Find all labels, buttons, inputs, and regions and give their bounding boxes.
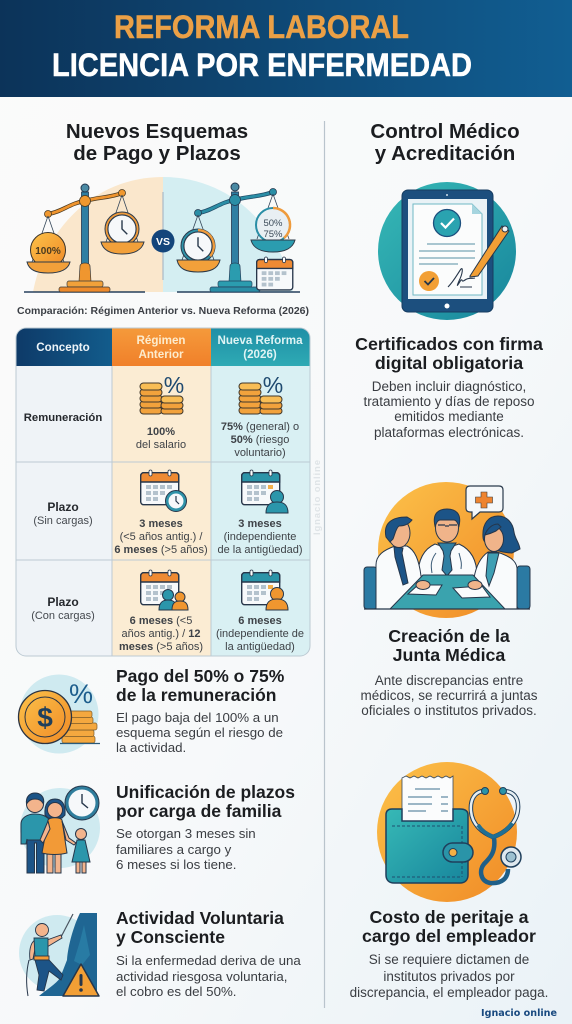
comparison table: [16, 328, 310, 656]
row: remuneración, anterior: 100%: [147, 426, 175, 438]
row: remuneración, reforma: 75% (general) o: [221, 421, 299, 433]
row: remuneración, anterior: [136, 372, 186, 451]
row: plazo sin cargas, reforma: 3 meses: [238, 518, 282, 530]
text: junta médica: [360, 626, 538, 718]
item: actividad voluntaria: Actividad Voluntaria: [116, 908, 284, 928]
row: remuneración, anterior: del salario: [136, 439, 186, 451]
text: costo de peritaje: [350, 907, 548, 1000]
header banner: [0, 0, 572, 97]
row labels: Remuneración: [24, 412, 102, 424]
comparison caption: Comparación: Régimen Anterior vs. Nueva Reforma (2026): [17, 305, 309, 317]
table header: Anterior: [138, 348, 184, 361]
left doctor: [376, 517, 425, 609]
icon: coin and percent: %: [69, 679, 93, 709]
left scale: 100%: [35, 246, 61, 257]
row: remuneración, reforma: 50% (riesgo: [231, 434, 289, 446]
icon: coin and percent: $: [37, 702, 53, 733]
item: pago 50 o 75: Pago del 50% o 75%: [116, 666, 285, 686]
item: unificación de plazos: por carga de familia: [116, 801, 282, 821]
row: plazo sin cargas, anterior: [114, 470, 208, 556]
right scale: [177, 183, 295, 292]
right doctor: [471, 516, 520, 609]
text: certificados: [355, 334, 543, 440]
item: actividad voluntaria: [19, 908, 301, 999]
item: pago 50 o 75: El pago baja del 100% a un: [116, 710, 279, 725]
text: certificados: digital obligatoria: [375, 353, 523, 373]
table header: Nueva Reforma: [217, 334, 303, 347]
table header: [36, 334, 303, 361]
icon: medical board: [364, 482, 530, 618]
heading: control médico: y Acreditación: [375, 142, 515, 165]
center doctor: [418, 509, 477, 576]
text: junta médica: Creación de la: [388, 626, 510, 646]
row: plazo con cargas, anterior: 6 meses (<5: [130, 615, 192, 627]
item: actividad voluntaria: el cobro es del 50%.: [116, 984, 236, 999]
row labels: Plazo: [47, 595, 79, 609]
icon: tablet with digital signature: [378, 182, 516, 320]
row: plazo con cargas, anterior: meses (>5 años): [119, 641, 203, 653]
VS badge: [152, 230, 174, 252]
text: junta médica: Junta Médica: [393, 645, 505, 665]
credit: Ignacio online: [481, 1008, 557, 1019]
item: pago 50 o 75: la actividad.: [116, 740, 186, 755]
icon: coin and percent: [18, 674, 100, 754]
right scale: 50%: [263, 218, 283, 229]
left scale: [27, 184, 144, 292]
row: plazo sin cargas, reforma: [217, 470, 303, 556]
speech bubble with cross: [466, 486, 503, 519]
text: certificados: emitidos mediante: [394, 409, 504, 424]
text: junta médica: oficiales o institutos privados.: [361, 703, 537, 718]
text: costo de peritaje: cargo del empleador: [362, 926, 536, 946]
table header: Concepto: [36, 341, 90, 354]
heading: Nuevos esquemas: [66, 120, 248, 165]
text: certificados: Deben incluir diagnóstico,: [372, 379, 526, 394]
heading: Nuevos esquemas: Nuevos Esquemas: [66, 120, 248, 143]
item: actividad voluntaria: y Consciente: [116, 927, 225, 947]
heading: Nuevos esquemas: de Pago y Plazos: [73, 142, 241, 165]
row: plazo con cargas, reforma: la antigüedad): [225, 641, 295, 653]
row: remuneración, anterior: %: [164, 372, 184, 398]
row: plazo con cargas, reforma: (independiente de: [216, 628, 304, 640]
row: plazo sin cargas, reforma: (independiente: [224, 531, 296, 543]
text: certificados: tratamiento y días de reposo: [363, 394, 535, 409]
item: unificación de plazos: Se otorgan 3 meses sin: [116, 826, 256, 841]
right scale: 75%: [263, 229, 283, 240]
title line: Reforma Laboral: REFORMA LABORAL: [114, 9, 409, 45]
row: plazo con cargas, reforma: 6 meses: [238, 615, 282, 627]
text: certificados: Certificados con firma: [355, 334, 543, 354]
row: plazo sin cargas, anterior: 6 meses (>5 años): [114, 544, 208, 556]
heading: control médico: Control Médico: [370, 120, 520, 143]
text: costo de peritaje: institutos privados por: [383, 969, 515, 984]
VS badge: VS: [156, 236, 170, 248]
row labels: [24, 412, 102, 622]
table header: Régimen: [137, 334, 185, 347]
row labels: (Sin cargas): [33, 515, 93, 527]
item: unificación de plazos: familiares a cargo y: [116, 842, 232, 857]
row: remuneración, reforma: voluntario): [234, 447, 286, 459]
text: costo de peritaje: discrepancia, el empleador paga.: [350, 985, 548, 1000]
item: unificación de plazos: 6 meses si los tiene.: [116, 857, 236, 872]
text: junta médica: médicos, se recurrirá a juntas: [360, 688, 538, 703]
table header: (2026): [243, 348, 277, 361]
watermark: Ignacio online: [312, 460, 323, 535]
text: certificados: plataformas electrónicas.: [374, 425, 524, 440]
row labels: (Con cargas): [31, 610, 95, 622]
row: plazo con cargas, anterior: [119, 570, 203, 653]
text: costo de peritaje: Costo de peritaje a: [369, 907, 529, 927]
item: unificación de plazos: Unificación de plazos: [116, 782, 295, 802]
item: actividad voluntaria: Si la enfermedad deriva de una: [116, 953, 301, 968]
row: plazo con cargas, reforma: [216, 570, 304, 653]
text: junta médica: Ante discrepancias entre: [375, 673, 523, 688]
illustration: scales comparison: [24, 177, 300, 292]
item: pago 50 o 75: esquema según el riesgo de: [116, 725, 283, 740]
item: actividad voluntaria: actividad riesgosa voluntaria,: [116, 969, 287, 984]
row: remuneración, reforma: %: [263, 372, 283, 398]
row: plazo sin cargas, anterior: 3 meses: [139, 518, 183, 530]
icon: climber and warning: [19, 913, 99, 996]
icon: wallet and stethoscope: [377, 762, 521, 902]
row: plazo sin cargas, anterior: (<5 años antig.) /: [120, 531, 203, 543]
row: plazo con cargas, anterior: años antig.) / 12: [122, 628, 200, 640]
item: unificación de plazos: [20, 782, 295, 873]
title line: Licencia por enfermedad: LICENCIA POR ENFERMEDAD: [52, 47, 472, 83]
row: plazo sin cargas, reforma: de la antigüedad): [217, 544, 303, 556]
row labels: Plazo: [47, 500, 79, 514]
item: pago 50 o 75: de la remuneración: [116, 685, 276, 705]
icon: family and clock: [20, 786, 100, 873]
row: remuneración, reforma: [221, 372, 299, 459]
item: pago 50 o 75: [18, 666, 285, 755]
text: costo de peritaje: Si se requiere dictamen de: [369, 952, 529, 967]
heading: control médico: [370, 120, 520, 165]
